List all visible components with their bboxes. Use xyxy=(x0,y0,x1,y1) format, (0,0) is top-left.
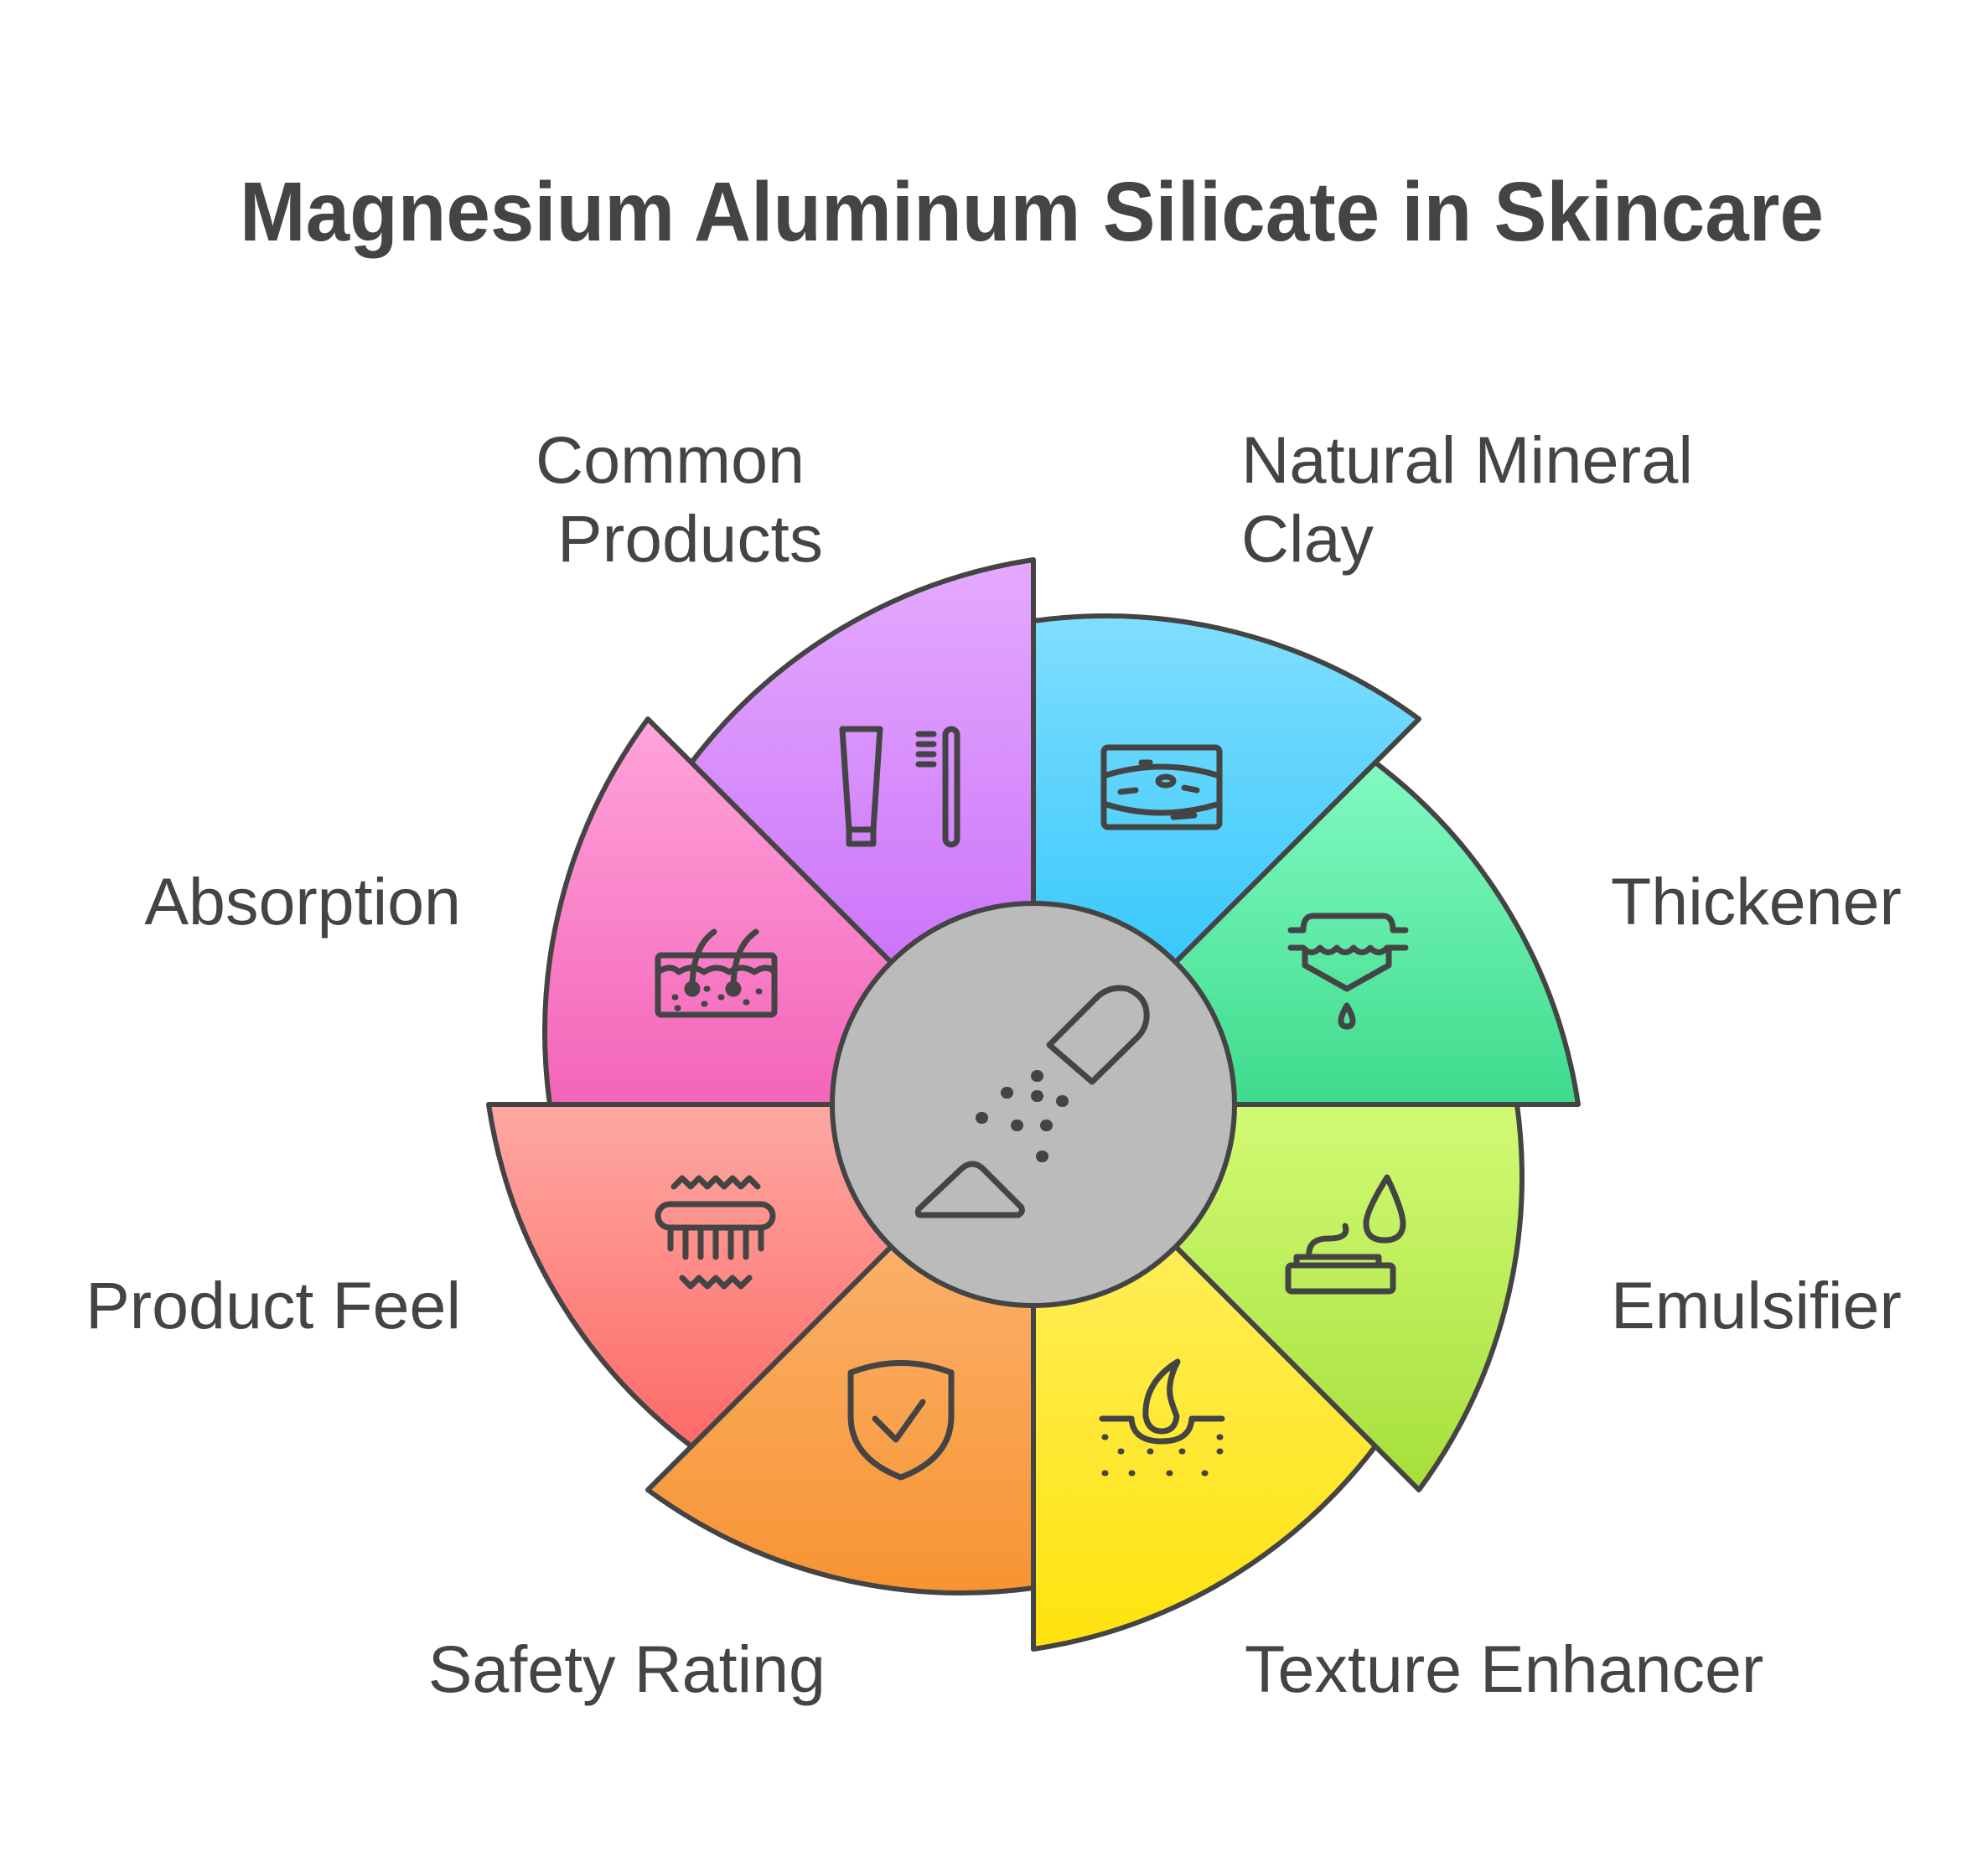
icon: shield xyxy=(851,1363,951,1477)
label: safety rating: Safety Rating xyxy=(428,1632,826,1706)
title: Magnesium Aluminum Silicate in Skincare xyxy=(240,165,1824,259)
icon: thickener xyxy=(1291,916,1406,1027)
label: texture enhancer: Texture Enhancer xyxy=(1245,1632,1763,1706)
label: absorption: Absorption xyxy=(144,864,461,939)
icon: center powder shaker xyxy=(918,988,1147,1215)
labels xyxy=(85,422,1902,1706)
icon: clay card xyxy=(1104,747,1219,827)
sector: natural mineral clay xyxy=(1033,616,1419,1104)
center circle xyxy=(832,903,1235,1306)
sector: common products xyxy=(691,560,1033,1104)
icon: texture enhancer xyxy=(1102,1362,1222,1473)
label: thickener: Thickener xyxy=(1611,864,1902,939)
label: emulsifier: Emulsifier xyxy=(1611,1268,1902,1342)
sector: absorption xyxy=(545,719,1033,1104)
label: product feel: Product Feel xyxy=(85,1268,461,1342)
icon: tube and toothbrush xyxy=(842,729,957,845)
icon: product feel xyxy=(658,1178,773,1286)
icon: emulsifier xyxy=(1288,1177,1403,1291)
label: natural mineral clay xyxy=(1241,422,1693,576)
sector: thickener xyxy=(1033,763,1578,1104)
label: natural mineral clay: Clay xyxy=(1241,501,1375,576)
label: natural mineral clay: Natural Mineral xyxy=(1241,422,1693,497)
wheel xyxy=(489,560,1578,1649)
label: common products: Products xyxy=(557,501,823,576)
sector: emulsifier xyxy=(1033,1104,1522,1490)
label: common products xyxy=(536,422,823,576)
label: common products: Common xyxy=(536,422,805,497)
sector: product feel xyxy=(489,1104,1033,1446)
sector: safety rating xyxy=(648,1104,1033,1593)
icon: absorption xyxy=(658,932,774,1015)
sector: texture enhancer xyxy=(1033,1104,1375,1649)
